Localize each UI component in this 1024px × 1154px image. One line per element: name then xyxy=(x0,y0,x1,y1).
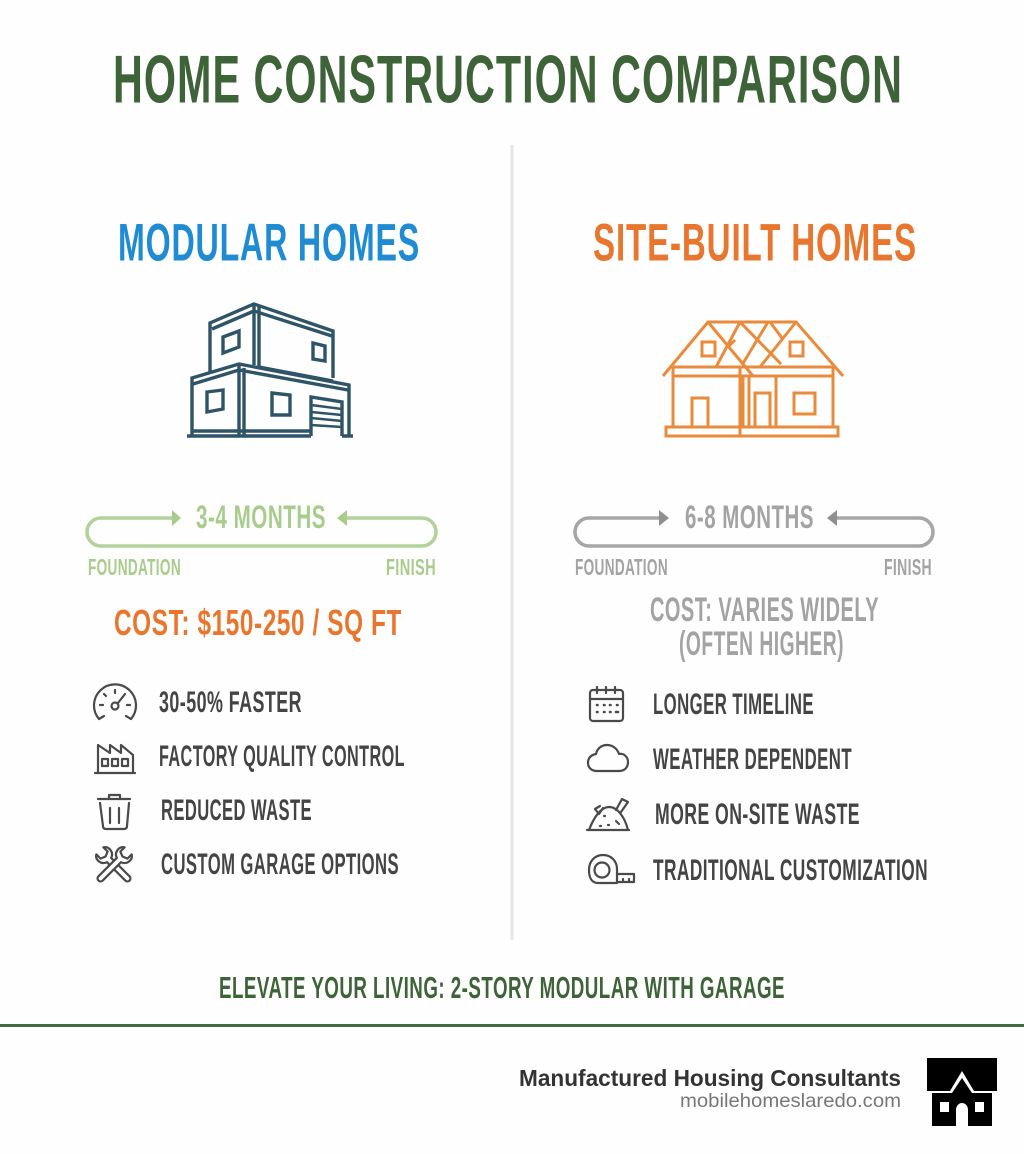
timeline: 3-4 months xyxy=(87,499,436,580)
timeline: 6-8 months xyxy=(575,499,933,580)
benefit: faster: 30-50% FASTER xyxy=(159,686,302,719)
footer: company name: Manufactured Housing Consultants xyxy=(519,1065,901,1091)
icon: calendar xyxy=(590,687,623,721)
timeline: 6-8 months: 6-8 MONTHS xyxy=(685,499,814,535)
benefit: custom garage options: CUSTOM GARAGE OPTIONS xyxy=(161,848,399,881)
icon: company logo xyxy=(927,1058,997,1126)
icon: speedometer xyxy=(94,684,136,719)
timeline: 3-4 months: FINISH xyxy=(386,554,436,580)
cost: site-built: (OFTEN HIGHER) xyxy=(679,625,844,663)
drawback: longer timeline: LONGER TIMELINE xyxy=(653,688,814,721)
panel: site-built homes xyxy=(575,214,933,887)
panel: modular homes xyxy=(87,214,436,886)
icon: framed house xyxy=(663,322,843,436)
timeline: 3-4 months: 3-4 MONTHS xyxy=(196,499,326,535)
icon: tape measure xyxy=(589,855,634,883)
benefit: factory quality control: FACTORY QUALITY CONTROL xyxy=(159,740,405,773)
icon: cloud xyxy=(588,745,628,771)
footer: website: mobilehomeslaredo.com xyxy=(680,1090,901,1112)
cost: site-built xyxy=(650,591,879,663)
icon: factory xyxy=(95,745,135,773)
drawback: more on-site waste: MORE ON-SITE WASTE xyxy=(655,798,860,831)
icon: modular two-story house xyxy=(187,304,353,436)
icon: dirt pile with shovel xyxy=(587,799,629,830)
drawback: weather dependent: WEATHER DEPENDENT xyxy=(653,743,852,776)
icon: trash can xyxy=(98,795,130,829)
timeline: 6-8 months: FINISH xyxy=(884,554,932,580)
heading: modular homes: MODULAR HOMES xyxy=(118,214,420,272)
timeline: 6-8 months: FOUNDATION xyxy=(575,554,668,580)
cost: modular: COST: $150-250 / SQ FT xyxy=(114,602,402,643)
timeline: 3-4 months: FOUNDATION xyxy=(88,554,181,580)
benefit: reduced waste: REDUCED WASTE xyxy=(161,794,312,827)
icon: crossed wrenches xyxy=(93,845,135,886)
